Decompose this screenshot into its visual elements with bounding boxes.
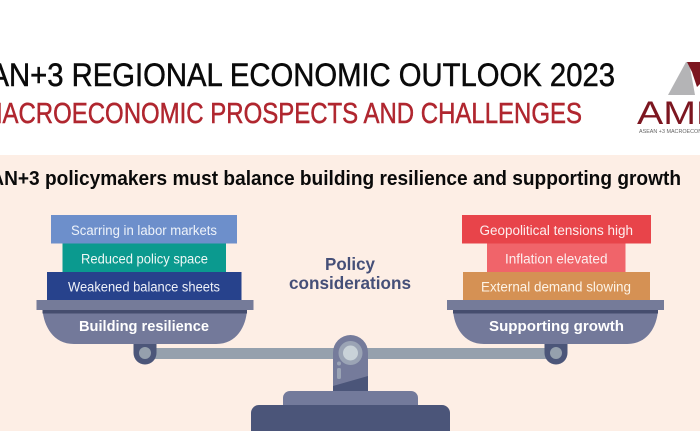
left pan: building resilience bbox=[36, 215, 254, 364]
left bowl bbox=[42, 310, 247, 344]
label: policy considerations bbox=[289, 254, 411, 293]
left hinge bbox=[134, 344, 156, 364]
scale pivot bbox=[333, 335, 368, 391]
block: geopolitical tensions high: Geopolitical tensions high bbox=[480, 223, 633, 238]
label: supporting growth: Supporting growth bbox=[489, 319, 624, 335]
scale beam bbox=[145, 348, 556, 359]
block: geopolitical tensions high bbox=[462, 215, 651, 244]
logo: AMRO bbox=[637, 62, 700, 135]
label: policy considerations: considerations bbox=[289, 273, 411, 293]
block: inflation elevated: Inflation elevated bbox=[505, 252, 608, 266]
block: external demand slowing bbox=[463, 272, 650, 300]
block: reduced policy space: Reduced policy space bbox=[81, 252, 208, 266]
left plate bbox=[36, 300, 254, 310]
block: scarring in labor markets: Scarring in labor markets bbox=[71, 223, 217, 238]
block: reduced policy space bbox=[62, 244, 226, 272]
right pan: supporting growth bbox=[447, 215, 664, 364]
block: inflation elevated bbox=[487, 244, 626, 272]
label: policy considerations: Policy bbox=[325, 254, 375, 274]
block: scarring in labor markets bbox=[51, 215, 237, 244]
block: external demand slowing: External demand slowing bbox=[481, 280, 631, 294]
logo mark bbox=[668, 62, 700, 95]
right bowl bbox=[453, 310, 658, 344]
panel: peach background bbox=[0, 155, 700, 431]
block: weakened balance sheets bbox=[47, 272, 242, 300]
scale base bbox=[251, 391, 450, 431]
block: weakened balance sheets: Weakened balance sheets bbox=[68, 280, 220, 294]
label: building resilience: Building resilience bbox=[79, 319, 209, 335]
right plate bbox=[447, 300, 664, 310]
right hinge bbox=[544, 344, 568, 364]
